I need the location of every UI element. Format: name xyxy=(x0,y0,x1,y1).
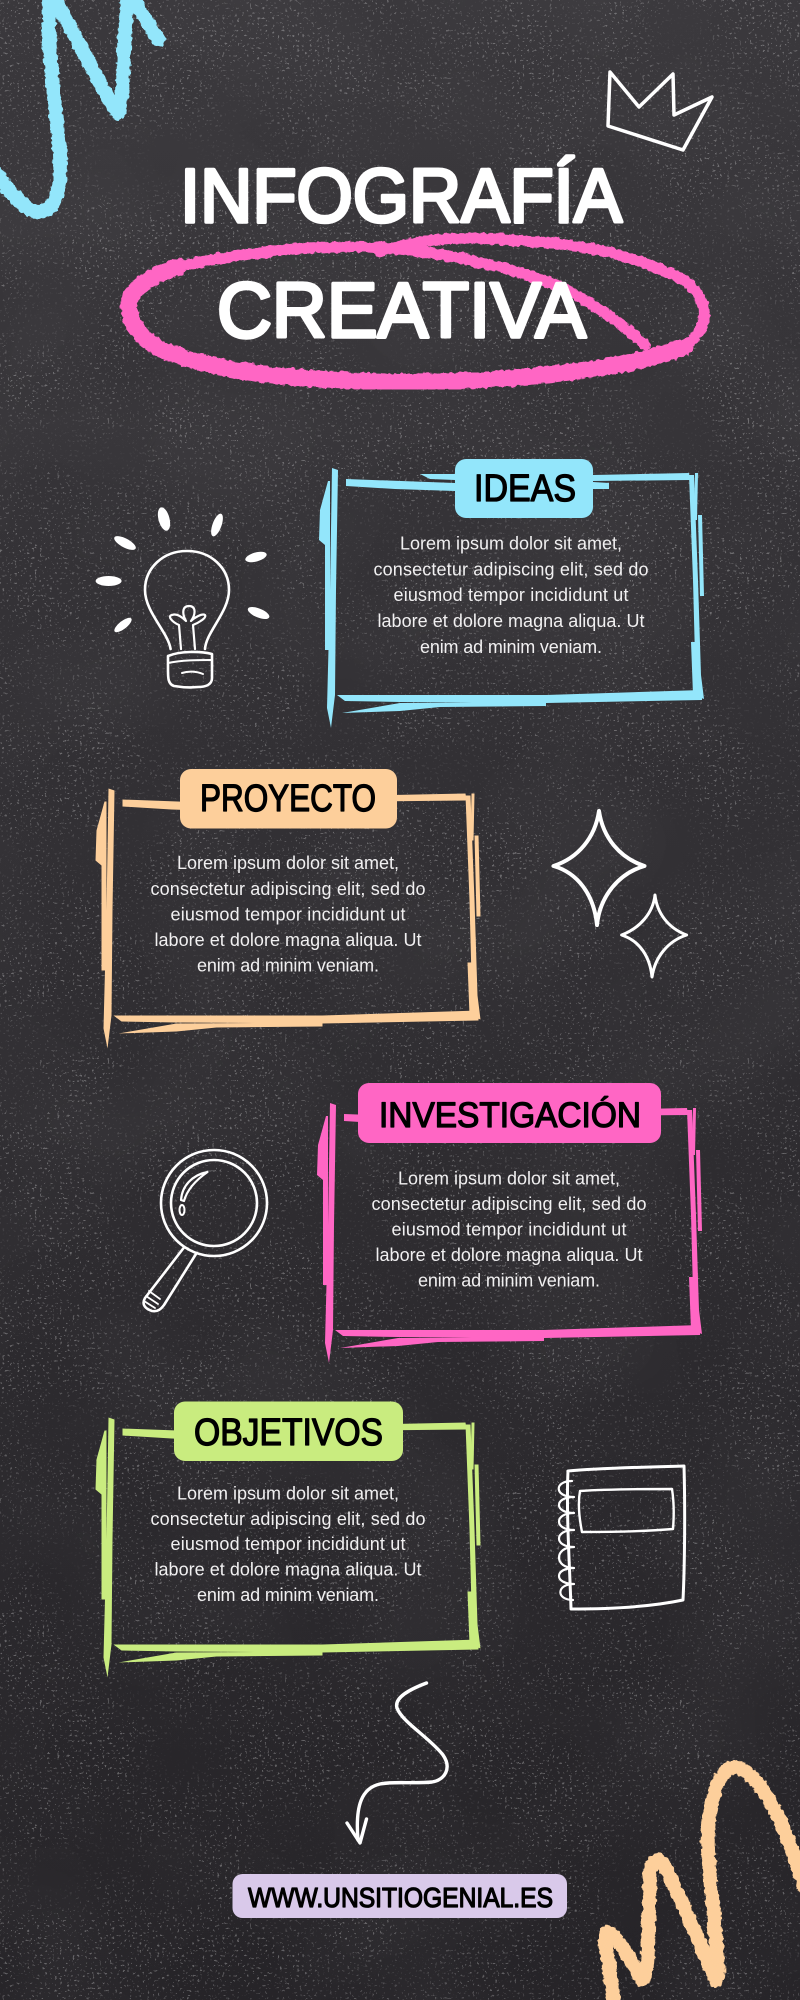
text block: proyecto: labore et dolore magna aliqua. Ut xyxy=(154,930,422,950)
panel: proyecto xyxy=(96,769,480,1048)
text block: objetivos: eiusmod tempor incididunt ut xyxy=(170,1534,406,1554)
text block: objetivos: enim ad minim veniam. xyxy=(197,1585,379,1605)
decorative peach scribble bottom right xyxy=(605,1767,800,2000)
badge: objetivos xyxy=(174,1402,403,1461)
text block: proyecto: eiusmod tempor incididunt ut xyxy=(170,904,406,924)
text block: proyecto: Lorem ipsum dolor sit amet, xyxy=(177,853,399,873)
text block: objetivos xyxy=(150,1484,426,1605)
text block: investigacion xyxy=(372,1168,646,1290)
arrow xyxy=(347,1683,447,1843)
badge: ideas xyxy=(455,459,593,518)
text block: objetivos: labore et dolore magna aliqua. Ut xyxy=(154,1560,422,1580)
icon: notebook xyxy=(559,1466,685,1609)
footer url badge xyxy=(232,1874,567,1918)
title line two: CREATIVA xyxy=(217,266,586,354)
panel: investigacion xyxy=(317,1083,702,1363)
panel: objetivos xyxy=(96,1402,480,1678)
badge: proyecto xyxy=(180,769,397,828)
text block: objetivos: consectetur adipiscing elit, sed do xyxy=(150,1509,426,1529)
icon: crown xyxy=(608,72,712,150)
text block: ideas: eiusmod tempor incididunt ut xyxy=(394,585,628,605)
green sketched frame xyxy=(96,1418,480,1678)
badge: investigacion: INVESTIGACIÓN xyxy=(379,1096,641,1135)
badge: investigacion xyxy=(358,1083,661,1143)
badge: ideas: IDEAS xyxy=(474,468,576,510)
footer url badge: WWW.UNSITIOGENIAL.ES xyxy=(248,1882,553,1913)
text block: ideas: enim ad minim veniam. xyxy=(420,637,602,657)
text block: proyecto xyxy=(150,853,426,976)
icon: magnifying glass xyxy=(144,1150,267,1311)
badge: proyecto: PROYECTO xyxy=(200,778,376,820)
blue sketched frame xyxy=(319,468,704,728)
badge: objetivos: OBJETIVOS xyxy=(194,1412,383,1454)
text block: investigacion: enim ad minim veniam. xyxy=(418,1270,600,1290)
text block: ideas: consectetur adipiscing elit, sed do xyxy=(374,559,648,579)
text block: investigacion: eiusmod tempor incididunt ut xyxy=(392,1220,626,1240)
text block: investigacion: Lorem ipsum dolor sit amet, xyxy=(398,1168,620,1188)
text block: objetivos: Lorem ipsum dolor sit amet, xyxy=(177,1484,399,1504)
title xyxy=(129,154,704,382)
text block: proyecto: enim ad minim veniam. xyxy=(197,956,379,976)
title line one: INFOGRAFÍA xyxy=(180,154,622,239)
peach sketched frame xyxy=(96,788,480,1048)
text block: investigacion: labore et dolore magna aliqua. Ut xyxy=(376,1245,642,1265)
pink hand-drawn ellipse xyxy=(129,238,704,382)
text block: ideas xyxy=(374,534,648,657)
icon: light bulb xyxy=(96,506,271,687)
icon: sparkles xyxy=(554,811,687,977)
text block: ideas: Lorem ipsum dolor sit amet, xyxy=(400,534,622,554)
text block: proyecto: consectetur adipiscing elit, sed do xyxy=(150,879,426,899)
text block: investigacion: consectetur adipiscing elit, sed do xyxy=(372,1194,646,1214)
pink sketched frame xyxy=(317,1103,702,1363)
text block: ideas: labore et dolore magna aliqua. Ut xyxy=(378,611,644,631)
panel: ideas xyxy=(319,459,704,728)
decorative blue scribble top left xyxy=(0,0,158,212)
